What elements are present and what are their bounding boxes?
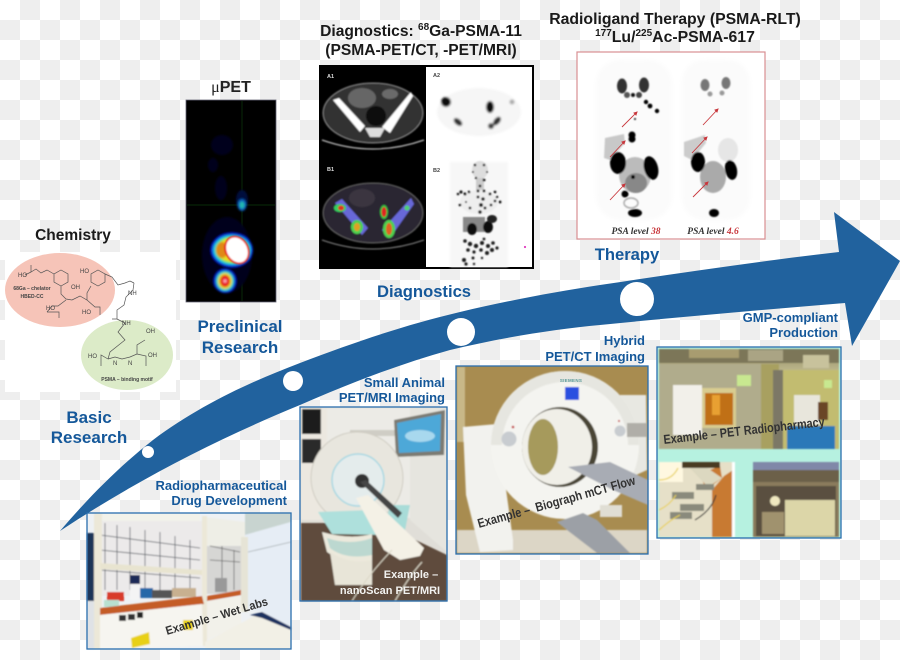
photo label: Example – PET Radiopharmacy: [663, 414, 826, 447]
scan letter labels: B2: [433, 168, 440, 174]
heading: diagnostics: Diagnostics:: [320, 23, 414, 40]
lesion arrows: [610, 109, 718, 200]
caption: radiopharmaceutical drug development: Radiopharmaceutical: [156, 478, 287, 493]
scan letter labels: [327, 73, 440, 174]
photo: hot cell interior: [753, 462, 839, 537]
caption: small animal imaging: PET/MRI Imaging: [339, 390, 445, 405]
heading: therapy: Radioligand Therapy (PSMA-RLT): [549, 11, 801, 28]
chelator label: [13, 286, 51, 300]
binding motif ellipse: [81, 320, 173, 390]
stage label: basic research: Research: [51, 428, 127, 447]
stage label: basic research: [51, 408, 127, 447]
scan: before therapy: [596, 60, 672, 220]
molecule atom labels: HO: [82, 310, 91, 316]
chelator ellipse: [5, 253, 115, 327]
timeline dot 1: [142, 446, 154, 458]
molecule atom labels: [18, 269, 157, 367]
caption: hybrid imaging: [545, 333, 645, 364]
molecule atom labels: NH: [128, 291, 137, 297]
caption: radiopharmaceutical drug development: [156, 478, 288, 508]
panel: therapy scans: [577, 52, 765, 239]
heading: therapy: 225: [635, 28, 653, 39]
motif label: PSMA – binding motif: [101, 377, 153, 383]
stage label: preclinical research: [197, 317, 283, 357]
caption: GMP production: GMP-compliant: [743, 310, 839, 325]
chelator label: HBED-CC: [20, 294, 44, 300]
panel: wet labs photo: [87, 513, 291, 649]
crosshair: [187, 101, 275, 301]
stage label: basic research: Basic: [66, 408, 112, 427]
timeline dot 4: [620, 282, 654, 316]
scan B1: fused PET/CT: [322, 183, 424, 249]
caption: radiopharmaceutical drug development: Drug Development: [171, 493, 288, 508]
caption: hybrid imaging: PET/CT Imaging: [545, 349, 645, 364]
molecule atom labels: HO: [46, 306, 55, 312]
panel: nanoScan photo: [300, 407, 447, 601]
molecule atom labels: N: [128, 361, 132, 367]
caption: hybrid imaging: Hybrid: [604, 333, 645, 348]
timeline dot 2: [283, 371, 303, 391]
stage label: preclinical research: Research: [202, 338, 278, 357]
photo label: nanoScan PET/MRI: [340, 585, 440, 597]
panel: GMP production photos: [657, 347, 841, 538]
scan: after therapy: [682, 60, 750, 220]
molecule atom labels: N: [113, 361, 117, 367]
scan hot spots: [202, 135, 253, 293]
photo label: Example – Wet Labs: [164, 594, 270, 638]
stage label: diagnostics: Diagnostics: [377, 282, 471, 301]
panel: Biograph photo: [456, 366, 648, 554]
molecule atom labels: HO: [80, 269, 89, 275]
photo label: Example – Biograph mCT Flow: [476, 472, 638, 531]
caption: small animal imaging: [339, 375, 445, 405]
chelator label: 68Ga – chelator: [13, 286, 51, 292]
molecule atom labels: OH: [71, 285, 80, 291]
heading: micro PET: μPET: [211, 79, 251, 96]
molecule atom labels: HO: [18, 273, 27, 279]
caption: small animal imaging: Small Animal: [364, 375, 445, 390]
heading: diagnostics: (PSMA-PET/CT, -PET/MRI): [325, 42, 517, 59]
molecule bonds: [25, 265, 146, 366]
heading: therapy: 177: [595, 28, 612, 39]
scan A1: CT: [322, 83, 424, 149]
heading: therapy: Ac-PSMA-617: [652, 29, 755, 46]
heading: therapy: [549, 11, 801, 46]
scan letter labels: A1: [327, 74, 334, 80]
caption: GMP production: [743, 310, 839, 340]
heading: therapy: Lu/: [612, 29, 636, 46]
photo: synthesis module: [659, 462, 735, 537]
heading: chemistry: Chemistry: [35, 227, 111, 244]
stage label: therapy: Therapy: [595, 245, 660, 264]
photo label: Example –: [384, 569, 438, 581]
molecule atom labels: OH: [146, 329, 155, 335]
photo: PET radiopharmacy: [659, 349, 839, 449]
PSA caption 4.6: PSA level 4.6: [687, 227, 739, 237]
scan B2: whole-body PET: [327, 73, 526, 267]
caption: GMP production: Production: [769, 325, 838, 340]
heading: diagnostics: Ga-PSMA-11: [429, 23, 522, 40]
stage label: preclinical research: Preclinical: [197, 317, 283, 336]
molecule atom labels: OH: [148, 353, 157, 359]
photo label: [340, 569, 440, 597]
timeline dot 3: [447, 318, 475, 346]
scan letter labels: B1: [327, 167, 334, 173]
panel: chemistry structure: [5, 252, 176, 392]
heading: diagnostics: 68: [418, 22, 430, 33]
panel: diagnostics scans: [51, 52, 841, 649]
scan A2: PET axial: [437, 88, 521, 136]
molecule atom labels: HO: [88, 354, 97, 360]
panel: micro PET image: [186, 100, 276, 302]
panel: Biograph photo: SIEMENS: [560, 378, 582, 383]
scan letter labels: A2: [433, 73, 440, 79]
PSA caption 38: PSA level 38: [611, 227, 661, 237]
hottest spot: [221, 232, 253, 268]
heading: diagnostics: [320, 22, 522, 59]
arrow: development timeline: [60, 212, 900, 531]
molecule atom labels: NH: [122, 321, 131, 327]
